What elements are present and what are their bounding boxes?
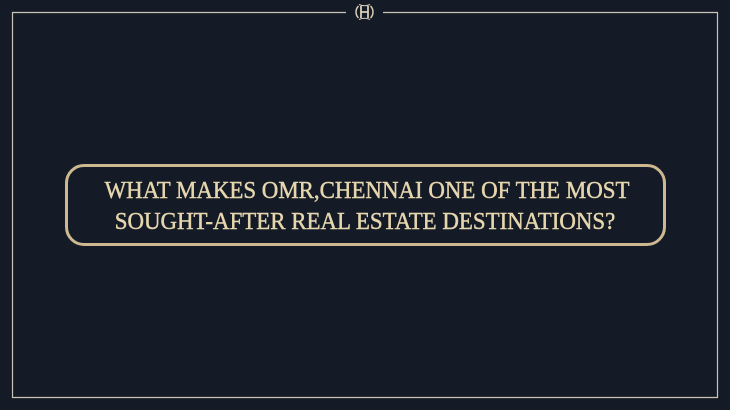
icon: logo emblem bbox=[356, 4, 373, 20]
title line 2: SOUGHT-AFTER REAL ESTATE DESTINATIONS? bbox=[114, 208, 615, 234]
callout: title box bbox=[65, 164, 666, 246]
title line 1: WHAT MAKES OMR,CHENNAI ONE OF THE MOST bbox=[104, 177, 629, 204]
